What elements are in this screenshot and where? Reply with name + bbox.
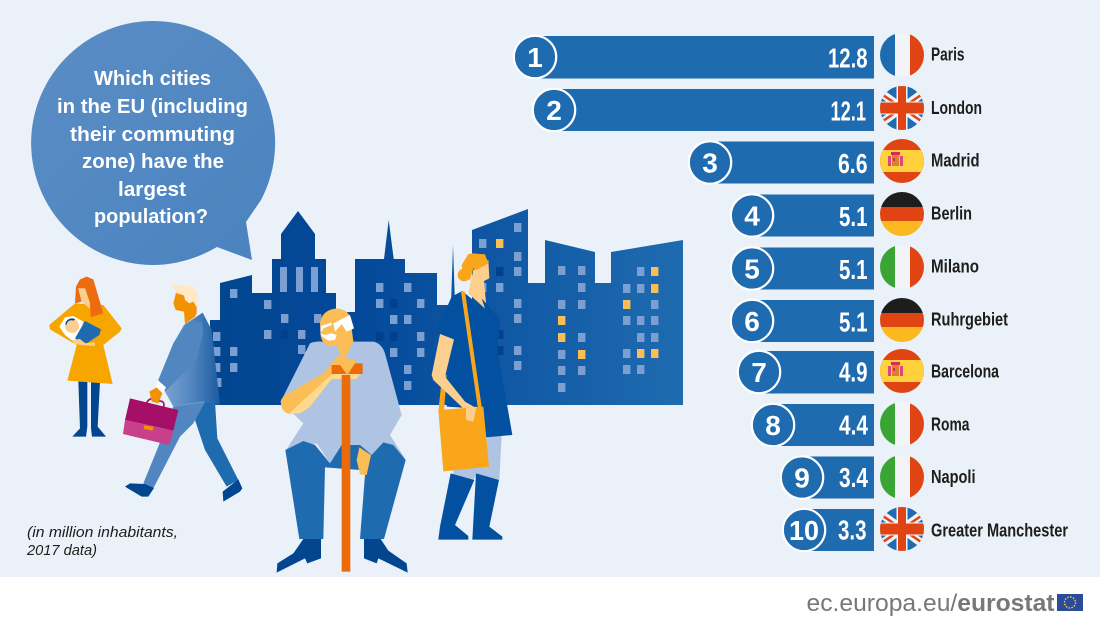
row 7: Barcelona: 4.9	[839, 356, 868, 388]
row 7: Barcelona	[738, 349, 1000, 394]
footer: eurostat logo: ec.europa.eu/eurostat	[806, 590, 1055, 617]
note: units	[26, 525, 178, 559]
row 5: Milano: Milano	[931, 256, 979, 276]
row 8: Roma: Roma	[931, 415, 970, 435]
figure: seated old man with cane	[277, 308, 408, 573]
row 1: Paris	[514, 33, 964, 78]
row 1: Paris: Paris	[931, 45, 964, 65]
row 3: Madrid: 3	[702, 148, 718, 178]
speech bubble with question: largest	[118, 178, 186, 201]
speech bubble with question: population?	[94, 205, 208, 228]
row 2: London	[533, 86, 982, 131]
note: units: (in million inhabitants,	[27, 525, 178, 541]
speech bubble with question: in the EU (including	[57, 95, 248, 118]
row 10: Greater Manchester	[783, 507, 1068, 551]
row 2: London: 2	[546, 95, 562, 126]
row 9: Napoli: 3.4	[839, 462, 868, 493]
row 5: Milano	[731, 245, 979, 290]
speech bubble with question	[31, 21, 275, 265]
speech bubble with question: zone) have the	[82, 150, 224, 173]
row 4: Berlin: 4	[744, 200, 760, 232]
row 5: Milano: 5.1	[839, 254, 868, 285]
row 6: Ruhrgebiet: Ruhrgebiet	[931, 310, 1008, 330]
row 3: Madrid	[689, 139, 980, 184]
row 1: Paris: 1	[527, 42, 543, 73]
figure: woman with shoulder bag	[432, 253, 512, 540]
row 3: Madrid: Madrid	[931, 151, 980, 171]
row 4: Berlin	[731, 192, 972, 237]
figure: woman holding baby	[49, 277, 122, 437]
row 10: Greater Manchester: 3.3	[838, 514, 866, 546]
row 4: Berlin: Berlin	[931, 204, 972, 224]
speech bubble with question: their commuting	[70, 123, 235, 146]
row 7: Barcelona: 7	[751, 357, 767, 388]
row 9: Napoli: Napoli	[931, 467, 976, 487]
figure: walking man with briefcase	[123, 284, 242, 502]
row 10: Greater Manchester: Greater Manchester	[931, 521, 1068, 541]
row 8: Roma	[752, 402, 970, 446]
row 9: Napoli: 9	[794, 462, 810, 494]
row 2: London: London	[931, 98, 982, 118]
row 10: Greater Manchester: 10	[789, 515, 819, 546]
row 6: Ruhrgebiet: 5.1	[839, 306, 868, 338]
row 3: Madrid: 6.6	[838, 148, 868, 179]
row 5: Milano: 5	[744, 254, 760, 284]
speech bubble with question: Which cities	[94, 67, 211, 90]
row 2: London: 12.1	[830, 96, 866, 126]
row 8: Roma: 8	[765, 410, 781, 441]
row 4: Berlin: 5.1	[839, 201, 868, 232]
city skyline	[210, 209, 683, 405]
row 9: Napoli	[781, 455, 976, 499]
row 8: Roma: 4.4	[839, 410, 868, 440]
row 6: Ruhrgebiet	[731, 298, 1008, 342]
note: units: 2017 data)	[26, 543, 97, 559]
row 6: Ruhrgebiet: 6	[744, 306, 760, 337]
row 7: Barcelona: Barcelona	[931, 362, 1000, 382]
row 1: Paris: 12.8	[828, 42, 868, 74]
